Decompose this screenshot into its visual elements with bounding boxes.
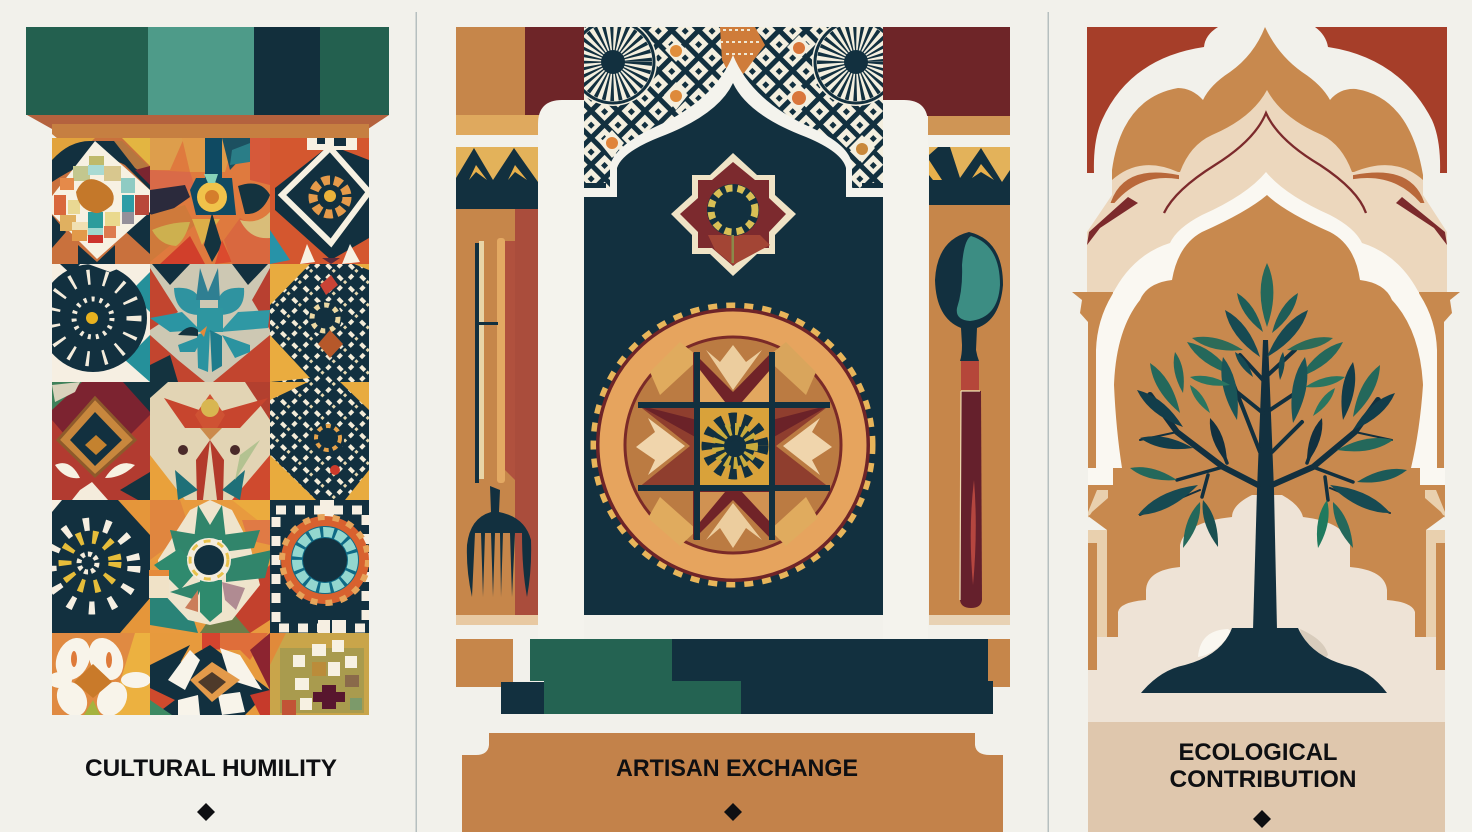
- lower colour bar: [456, 639, 1010, 714]
- diamond marker: [724, 803, 742, 821]
- caption plate: [1088, 722, 1445, 832]
- medallion centre square: [638, 352, 830, 540]
- white arch outline: [584, 55, 883, 198]
- heading: ecological contribution: CONTRIBUTION: [1170, 766, 1356, 793]
- right tall panel with spoon: [929, 205, 1010, 625]
- tile: orange ring teal centre: [270, 500, 369, 633]
- white pillars: [538, 100, 928, 640]
- icon: fork: [467, 486, 531, 597]
- tan inner niche: [1113, 195, 1423, 640]
- lattice spandrel: [584, 27, 883, 188]
- tile: white petals orange: [52, 633, 150, 715]
- dark niche: [584, 83, 883, 615]
- heading: cultural humility: CULTURAL HUMILITY: [85, 755, 337, 782]
- icon: star ornament: [671, 153, 796, 276]
- tile: dark diamond white: [150, 633, 270, 715]
- chopsticks: [475, 238, 505, 483]
- stepped cream ground: [1088, 495, 1445, 722]
- icon: olive tree: [1129, 263, 1408, 693]
- tile: lattice diamond top: [270, 264, 369, 382]
- heading: ecological contribution: ECOLOGICAL: [1178, 739, 1338, 766]
- cream inner dome: [1087, 90, 1447, 292]
- ground highlights: [1198, 629, 1328, 661]
- left pillar and zigzag: [456, 147, 538, 209]
- tile: yellow flower kites: [150, 138, 270, 264]
- tile: teal star: [150, 264, 270, 382]
- panel: cultural humility: [26, 27, 389, 821]
- colour band lintel: [26, 27, 389, 115]
- white arch: [1088, 172, 1445, 485]
- heading: ecological contribution: [1170, 739, 1356, 793]
- heading: artisan exchange: ARTISAN EXCHANGE: [616, 755, 858, 782]
- centre arch panel: [584, 27, 883, 615]
- diamond marker: [197, 803, 215, 821]
- left tall panel with fork: [456, 209, 538, 625]
- lower side columns: [1088, 485, 1445, 670]
- upper blocks: [456, 27, 1010, 135]
- tree leaves: [1129, 263, 1408, 550]
- tile: red star beige: [150, 382, 270, 500]
- tile: white diamond with checks: [52, 138, 150, 264]
- right pillar and zigzag: [929, 147, 1010, 206]
- columns and capitals: [1072, 292, 1460, 470]
- tile: lattice diamond lower: [270, 382, 369, 500]
- tile mosaic: [39, 138, 369, 722]
- medallion: [594, 306, 872, 584]
- tile: maroon cross checks: [270, 633, 369, 715]
- diamond marker: [1253, 810, 1271, 828]
- crescents and maroon lines: [1087, 113, 1447, 245]
- cornice: [27, 115, 389, 139]
- tile: dark rosette: [52, 264, 150, 382]
- panel: artisan exchange: [456, 18, 1010, 832]
- tree branches: [1253, 340, 1277, 630]
- icon: spoon: [935, 232, 1003, 608]
- tile: brown concentric diamond: [52, 382, 150, 500]
- medallion star: [636, 342, 832, 548]
- tan outer dome: [1112, 27, 1423, 205]
- tile: white diamond floral: [270, 138, 369, 264]
- red spandrels: [1087, 27, 1447, 173]
- tree mound: [1141, 628, 1387, 693]
- caption plate: [462, 733, 1003, 832]
- tile: dark octagon star: [50, 500, 150, 633]
- panel: ecological contribution: [1072, 27, 1460, 832]
- tile: green star: [149, 500, 272, 633]
